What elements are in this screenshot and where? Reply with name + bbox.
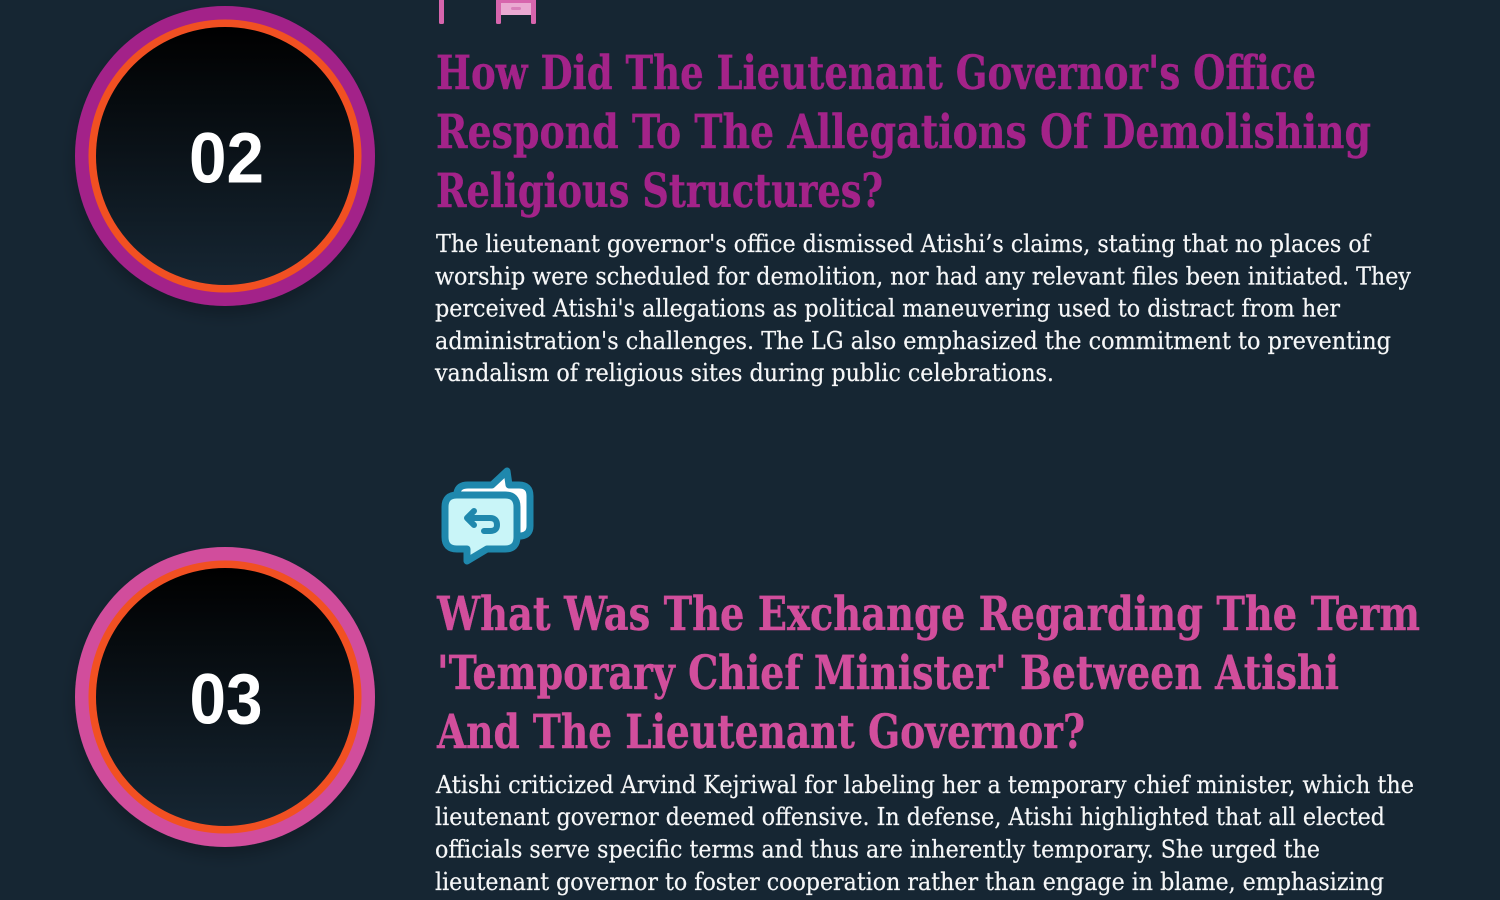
body text 02: perceived Atishi's allegations as political maneuvering used to distract from her xyxy=(435,294,1340,322)
badge 03: 03 xyxy=(190,660,262,740)
body text 02 xyxy=(434,230,1411,387)
body text 03: lieutenant governor to foster cooperation rather than engage in blame, emphasizing xyxy=(435,868,1384,896)
icon: reply speech bubbles xyxy=(445,471,530,561)
body text 02: worship were scheduled for demolition, nor had any relevant files been initiated. They xyxy=(435,262,1411,290)
body text 03 xyxy=(435,771,1414,896)
badge 02: 02 xyxy=(189,120,264,198)
heading 02 xyxy=(436,46,1371,219)
body text 02: vandalism of religious sites during public celebrations. xyxy=(434,359,1054,387)
badge 02 xyxy=(75,6,375,306)
icon: partially cropped bedside table xyxy=(439,0,536,24)
body text 03: Atishi criticized Arvind Kejriwal for labeling her a temporary chief minister, which the xyxy=(435,771,1414,799)
badge 03 xyxy=(75,547,375,847)
heading 02: Religious Structures? xyxy=(436,164,883,219)
body text 02: The lieutenant governor's office dismissed Atishi’s claims, stating that no places of xyxy=(436,230,1372,258)
section 02 xyxy=(75,6,1411,387)
body text 02: administration's challenges. The LG also emphasized the commitment to preventing xyxy=(435,327,1391,355)
body text 03: officials serve specific terms and thus are inherently temporary. She urged the xyxy=(435,836,1320,864)
heading 03: And The Lieutenant Governor? xyxy=(436,705,1085,760)
body text 03: lieutenant governor deemed offensive. In defense, Atishi highlighted that all elected xyxy=(435,803,1385,831)
heading 03 xyxy=(436,587,1420,760)
section 03 xyxy=(75,547,1420,896)
